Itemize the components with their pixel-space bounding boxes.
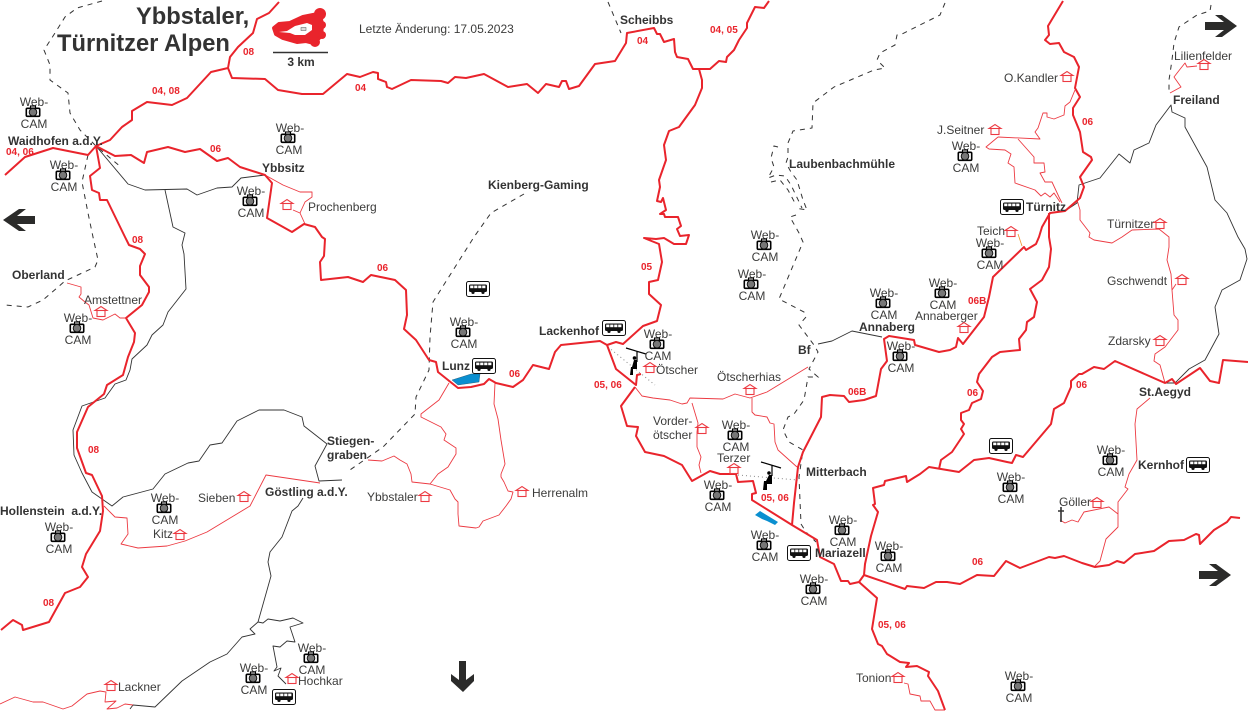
webcams: Web- <box>704 478 732 492</box>
route number labels: 06B <box>968 296 986 307</box>
route number labels: 06 <box>377 263 389 274</box>
hut labels: Amstettner <box>84 293 142 307</box>
webcams: Web- <box>929 276 957 290</box>
webcams: CAM <box>752 250 778 264</box>
route number labels: 05, 06 <box>761 493 789 504</box>
route number labels: 04, 06 <box>6 147 34 158</box>
hut labels: Teich <box>977 224 1005 238</box>
webcams: Web- <box>875 539 903 553</box>
hut labels: Kitz <box>153 527 173 541</box>
webcams: Web- <box>887 339 915 353</box>
webcams: Web- <box>976 236 1004 250</box>
hut labels: Zdarsky <box>1108 334 1151 348</box>
arrow: right bottom <box>1199 564 1231 586</box>
route number labels: 06 <box>972 557 984 568</box>
webcams: CAM <box>953 161 979 175</box>
town labels: St.Aegyd <box>1139 385 1191 399</box>
hut labels: J.Seitner <box>937 123 984 137</box>
town labels: graben <box>327 448 367 462</box>
webcams: CAM <box>51 180 77 194</box>
route number labels: 04, 08 <box>152 86 180 97</box>
webcams: CAM <box>238 206 264 220</box>
hut labels: Terzer <box>717 451 750 465</box>
webcams: Web- <box>240 661 268 675</box>
webcams: CAM <box>1006 691 1032 705</box>
webcams: CAM <box>645 349 671 363</box>
hut labels: Göller <box>1059 495 1091 509</box>
webcams: Web- <box>800 572 828 586</box>
route number labels: 06 <box>1082 117 1094 128</box>
webcams: CAM <box>21 117 47 131</box>
logo: region map with scale bar: 3 km <box>287 55 315 69</box>
route number labels: 06 <box>509 369 521 380</box>
webcams: Web- <box>644 327 672 341</box>
town labels: Lunz <box>442 359 470 373</box>
hut labels: Vorder- <box>653 414 692 428</box>
hut labels: Türnitzer <box>1107 217 1154 231</box>
arrow: left <box>3 209 35 231</box>
icon: chairlift at Ötscher <box>626 348 646 375</box>
hut labels: Prochenberg <box>308 200 377 214</box>
hut labels: Herrenalm <box>532 486 588 500</box>
hut labels: Ybbstaler <box>367 490 418 504</box>
hut labels: Annaberger <box>915 309 978 323</box>
webcams: Web- <box>751 528 779 542</box>
webcams: CAM <box>752 550 778 564</box>
webcams: CAM <box>723 440 749 454</box>
title: Ybbstaler, <box>136 4 249 30</box>
route number labels: 06 <box>967 388 979 399</box>
town labels: Annaberg <box>859 320 915 334</box>
route number labels: 08 <box>243 47 255 58</box>
town labels: Stiegen- <box>327 434 374 448</box>
town labels: Türnitz <box>1026 200 1066 214</box>
webcams: Web- <box>997 470 1025 484</box>
map: dashed railway lines <box>5 1 1211 542</box>
last changed date: Letzte Änderung: 17.05.2023 <box>359 22 514 36</box>
town labels: Hollenstein a.d.Y. <box>0 504 102 518</box>
bus stop icons <box>272 200 1210 704</box>
webcams: CAM <box>830 535 856 549</box>
webcams: CAM <box>276 143 302 157</box>
town labels: Oberland <box>12 268 65 282</box>
webcams: Web- <box>722 418 750 432</box>
webcams: CAM <box>705 500 731 514</box>
webcams: CAM <box>46 542 72 556</box>
town labels: Scheibbs <box>620 13 674 27</box>
webcams: CAM <box>977 258 1003 272</box>
route number labels: 04, 05 <box>710 25 738 36</box>
webcams: CAM <box>998 492 1024 506</box>
webcams: Web- <box>738 267 766 281</box>
webcams: CAM <box>1098 465 1124 479</box>
arrow: down <box>451 661 474 692</box>
title: Türnitzer Alpen <box>57 31 230 57</box>
map: lakes <box>452 374 778 525</box>
route number labels: 08 <box>43 598 55 609</box>
webcams: CAM <box>801 594 827 608</box>
hut labels: Ötscherhias <box>717 370 781 384</box>
town labels <box>0 13 1220 560</box>
town labels: Laubenbachmühle <box>789 157 895 171</box>
hut labels: Lilienfelder <box>1174 49 1232 63</box>
route number labels: 05, 06 <box>878 620 906 631</box>
webcams: Web- <box>751 228 779 242</box>
webcams: Web- <box>50 158 78 172</box>
webcams: Web- <box>1005 669 1033 683</box>
webcams: Web- <box>45 520 73 534</box>
webcams: CAM <box>65 333 91 347</box>
route number labels: 08 <box>132 235 144 246</box>
hut labels: Ötscher <box>656 363 698 377</box>
webcams <box>20 95 1125 705</box>
hut labels: Gschwendt <box>1107 274 1168 288</box>
webcams: Web- <box>298 641 326 655</box>
webcams: CAM <box>241 683 267 697</box>
webcams: Web- <box>20 95 48 109</box>
route number labels: 06B <box>848 387 866 398</box>
arrow: right top <box>1205 15 1237 37</box>
route number labels <box>6 25 1094 631</box>
webcams: CAM <box>871 308 897 322</box>
hut labels: Sieben <box>198 491 235 505</box>
webcams: CAM <box>152 513 178 527</box>
title <box>57 4 249 57</box>
town labels: Kienberg-Gaming <box>488 178 589 192</box>
webcams: CAM <box>888 361 914 375</box>
webcams: Web- <box>276 121 304 135</box>
town labels: Göstling a.d.Y. <box>265 485 348 499</box>
webcams: Web- <box>64 311 92 325</box>
route number labels: 04 <box>355 83 367 94</box>
webcams: Web- <box>237 184 265 198</box>
town labels: Mariazell <box>815 546 866 560</box>
webcams: Web- <box>1097 443 1125 457</box>
hut labels: ötscher <box>653 428 692 442</box>
webcams: CAM <box>739 289 765 303</box>
town labels: Mitterbach <box>806 465 867 479</box>
logo: region map with scale bar <box>273 8 328 69</box>
map: black thin roads <box>73 105 1247 709</box>
icon: chairlift at Terzer <box>761 462 781 490</box>
icon: summit cross at Göller <box>1058 507 1064 522</box>
town labels: Bf <box>798 343 812 357</box>
webcams: Web- <box>952 139 980 153</box>
webcams: CAM <box>299 663 325 677</box>
hut labels: Lackner <box>118 680 161 694</box>
town labels: Kernhof <box>1138 458 1185 472</box>
route number labels: 04 <box>637 36 649 47</box>
town labels: Freiland <box>1173 93 1220 107</box>
town labels: Ybbsitz <box>262 161 305 175</box>
hut labels: Hochkar <box>298 674 343 688</box>
webcams: Web- <box>151 491 179 505</box>
hut icons <box>95 60 1210 690</box>
webcams: Web- <box>870 286 898 300</box>
webcams: Web- <box>450 315 478 329</box>
hut labels: O.Kandler <box>1004 71 1058 85</box>
town labels: Lackenhof <box>539 324 600 338</box>
route number labels: 06 <box>1076 380 1088 391</box>
webcams: CAM <box>876 561 902 575</box>
town labels: Waidhofen a.d.Y. <box>8 134 103 148</box>
webcams: CAM <box>451 337 477 351</box>
hut labels: Tonion <box>856 671 891 685</box>
webcams: CAM <box>930 298 956 312</box>
route number labels: 05 <box>641 262 653 273</box>
route number labels: 08 <box>88 445 100 456</box>
route number labels: 05, 06 <box>594 380 622 391</box>
webcams: Web- <box>829 513 857 527</box>
route number labels: 06 <box>210 144 222 155</box>
